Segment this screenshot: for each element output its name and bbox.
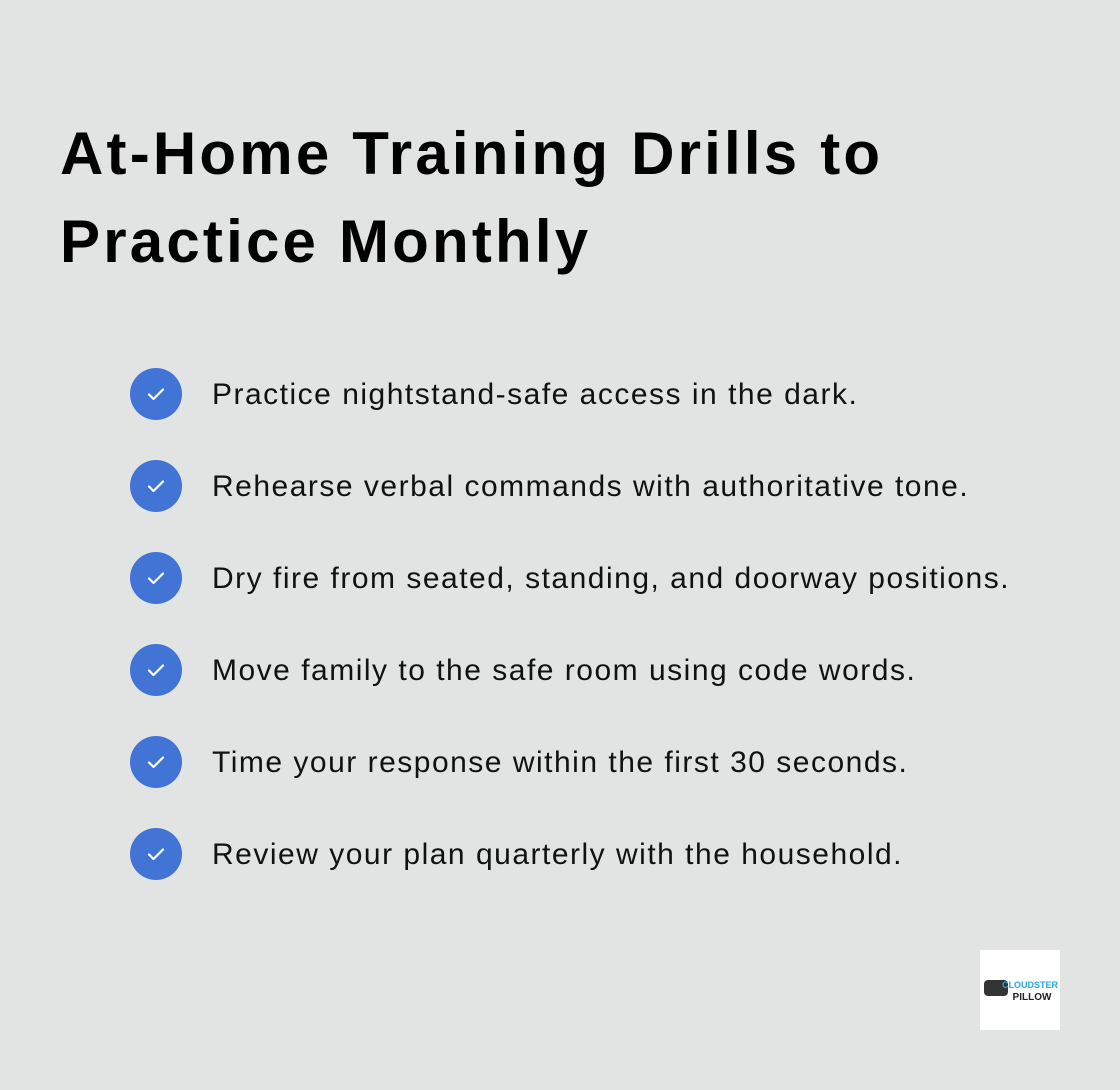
text: Dry fire from seated, standing, and doorway positions. xyxy=(212,562,1010,595)
text: Review your plan quarterly with the household. xyxy=(212,838,903,871)
logo xyxy=(980,950,1060,1030)
text: Practice nightstand-safe access in the dark. xyxy=(212,378,858,411)
icon: check xyxy=(130,368,182,420)
title: At-Home Training Drills to xyxy=(60,120,883,187)
item 5 xyxy=(130,736,908,788)
item 4 xyxy=(130,644,916,696)
text: Time your response within the first 30 seconds. xyxy=(212,746,908,779)
item 6 xyxy=(130,828,903,880)
item 2 xyxy=(130,460,969,512)
icon: check xyxy=(130,460,182,512)
logo: PILLOW xyxy=(1013,992,1052,1003)
item 3 xyxy=(130,552,1010,604)
icon: check xyxy=(130,644,182,696)
text: Move family to the safe room using code words. xyxy=(212,654,916,687)
icon: check xyxy=(130,828,182,880)
logo: CLOUDSTER xyxy=(1002,980,1058,990)
item 1 xyxy=(130,368,858,420)
text: Rehearse verbal commands with authoritative tone. xyxy=(212,470,969,503)
title: Practice Monthly xyxy=(60,208,591,275)
icon: check xyxy=(130,736,182,788)
title xyxy=(60,120,883,275)
icon: check xyxy=(130,552,182,604)
